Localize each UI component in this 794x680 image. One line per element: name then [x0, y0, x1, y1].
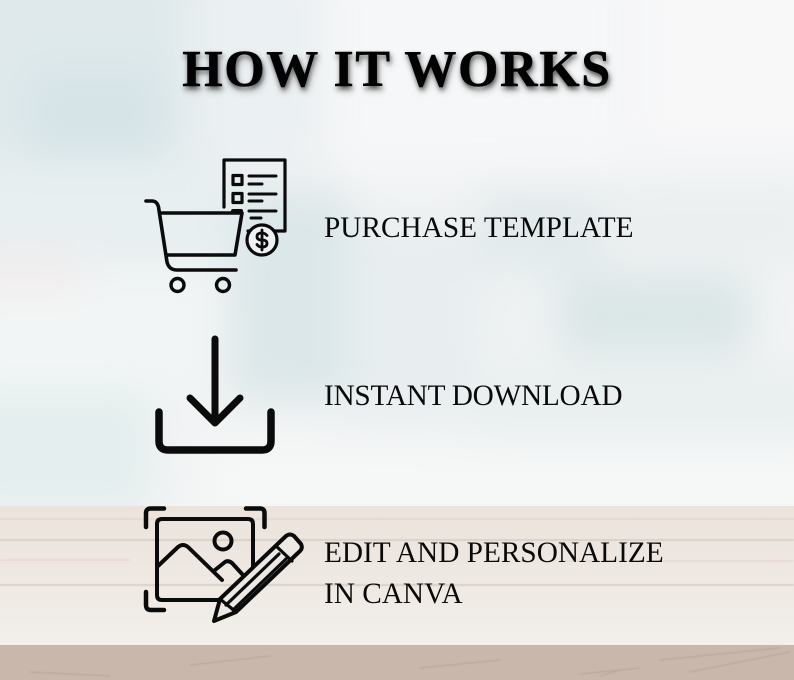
title: HOW IT WORKS — [182, 41, 612, 98]
step 3 label: EDIT AND PERSONALIZE — [324, 537, 664, 569]
icon: shopping cart with invoice and dollar coin — [146, 160, 285, 292]
step 1 label: PURCHASE TEMPLATE — [324, 212, 634, 244]
step 2 label: INSTANT DOWNLOAD — [324, 380, 622, 412]
icon: download arrow into tray — [159, 339, 271, 450]
step 3 label: IN CANVA — [324, 578, 463, 610]
icon: image with frame corners and pencil — [146, 508, 302, 621]
step 3 label — [324, 537, 664, 610]
